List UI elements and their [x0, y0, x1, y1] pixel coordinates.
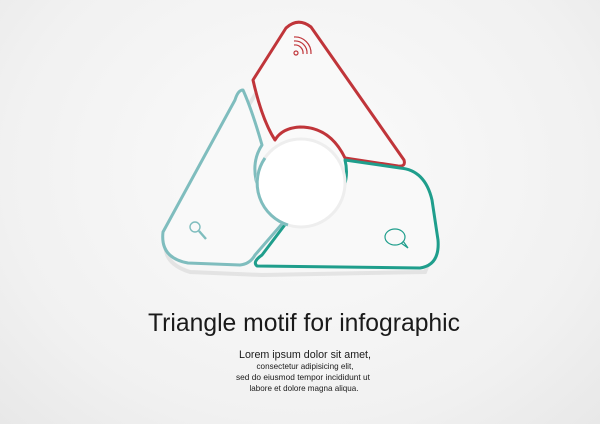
body text: [236, 349, 371, 393]
body text: Lorem ipsum dolor sit amet,: [239, 349, 371, 361]
body text: labore et dolore magna aliqua.: [250, 383, 358, 393]
segment: red top: [253, 22, 404, 166]
shadow outline: [166, 30, 430, 275]
segment: light teal left: [163, 90, 288, 265]
icon: magnifier: [190, 222, 206, 239]
center circle: [257, 139, 345, 227]
icon: rss: [294, 37, 311, 55]
icon: chat bubble: [385, 229, 408, 248]
body text: consectetur adipisicing elit,: [256, 361, 354, 371]
title: Triangle motif for infographic: [148, 309, 460, 337]
body text: sed do eiusmod tempor incididunt ut: [236, 372, 371, 382]
segment: green right: [255, 160, 438, 268]
